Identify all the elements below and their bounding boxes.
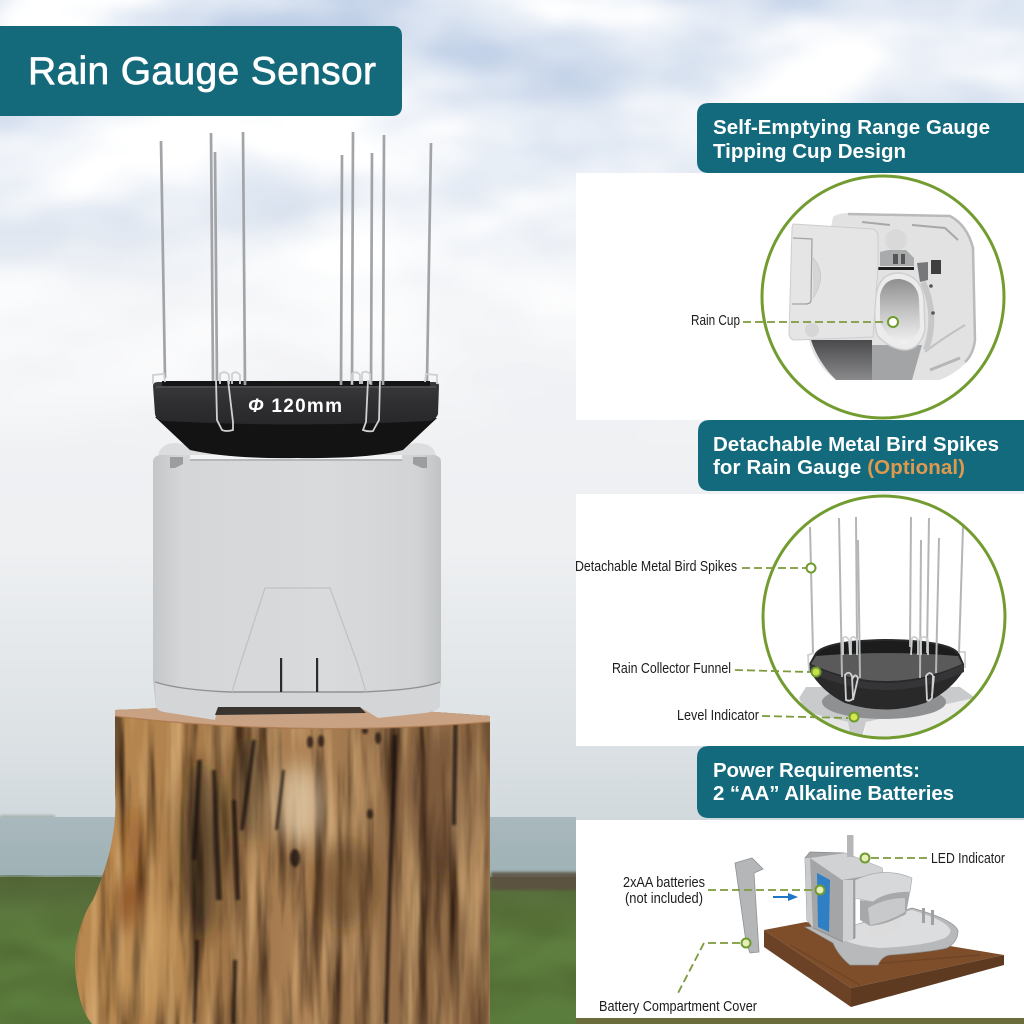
- heading: tipping cup: Tipping Cup Design: [713, 140, 906, 163]
- diameter label: Φ 120mm: [248, 396, 342, 417]
- tree stump: [70, 700, 495, 1024]
- funnel: [153, 381, 439, 458]
- heading: tipping cup: Self-Emptying Range Gauge: [713, 116, 990, 139]
- rain gauge sensor product: [153, 132, 441, 720]
- bird spikes: [153, 132, 437, 431]
- panel: bird spikes: [575, 420, 1024, 746]
- title banner: Rain Gauge Sensor: [28, 50, 376, 93]
- heading: power requirements: 2 “AA” Alkaline Batteries: [713, 782, 954, 805]
- heading: bird spikes: [698, 420, 1024, 491]
- callout: batteries: [623, 874, 824, 907]
- heading: power requirements: [697, 746, 1024, 818]
- callout: led indicator: [860, 850, 1005, 867]
- heading: power requirements: Power Requirements:: [713, 759, 920, 782]
- callout: batteries: 2xAA batteries: [623, 874, 705, 891]
- callout: battery compartment cover: Battery Compartment Cover: [599, 998, 757, 1015]
- green circle: tipping cup: [762, 176, 1004, 418]
- callout: batteries: (not included): [625, 890, 703, 907]
- callout: rain collector funnel: [612, 660, 820, 677]
- green circle: bird spikes: [763, 496, 1005, 738]
- battery compartment cover: [735, 858, 763, 953]
- bird spikes illustration: [808, 517, 965, 701]
- callout: level indicator: [677, 707, 858, 724]
- gauge base interior photo: [789, 213, 976, 380]
- title banner: [0, 26, 402, 116]
- callout: rain cup: [691, 312, 898, 329]
- callout: level indicator: Level Indicator: [677, 707, 759, 724]
- callout: rain cup: Rain Cup: [691, 312, 740, 329]
- panel: power requirements: [576, 746, 1024, 1024]
- wooden board: [764, 922, 1004, 1007]
- funnel with spikes illustration: [799, 639, 974, 745]
- callout: detachable metal bird spikes: Detachable Metal Bird Spikes: [575, 558, 737, 575]
- panel: tipping cup: [576, 103, 1024, 420]
- heading: tipping cup: [697, 103, 1024, 173]
- heading: bird spikes: Detachable Metal Bird Spikes: [713, 433, 999, 456]
- callout: battery compartment cover: [599, 938, 757, 1015]
- gauge housing: [153, 443, 441, 720]
- heading: bird spikes: for Rain Gauge (Optional): [713, 456, 965, 479]
- battery compartment device: [805, 835, 958, 965]
- callout: rain collector funnel: Rain Collector Funnel: [612, 660, 731, 677]
- callout: led indicator: LED Indicator: [931, 850, 1005, 867]
- arrow: [773, 893, 798, 901]
